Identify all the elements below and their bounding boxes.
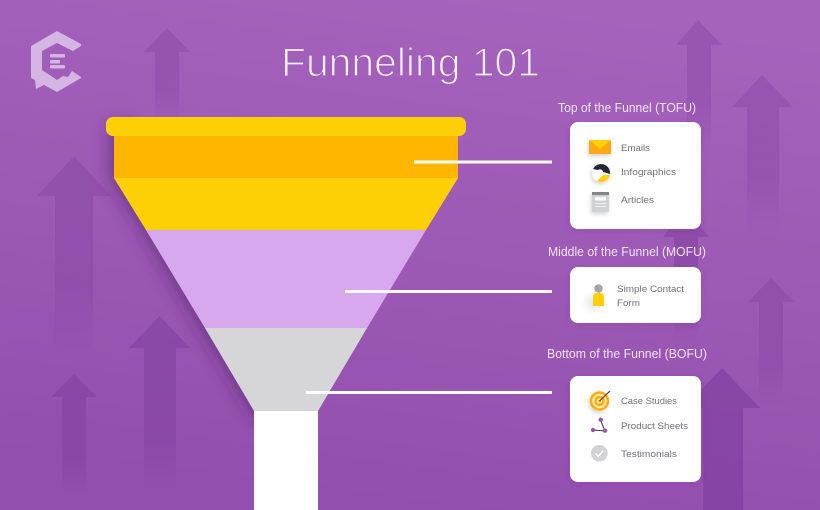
icon: check badge (591, 445, 608, 462)
panel: MOFU (570, 267, 701, 323)
icon: article (592, 192, 609, 212)
panel: BOFU (570, 376, 701, 482)
connector line TOFU (414, 160, 552, 164)
connector line BOFU (306, 391, 552, 394)
icon: target (590, 391, 610, 411)
label: Infographics: Infographics (621, 167, 676, 178)
funnel orange band (114, 135, 458, 178)
label: Case Studies: Case Studies (621, 396, 677, 407)
funnel (106, 117, 466, 510)
icon: pie chart (592, 164, 610, 182)
label: Testimonials: Testimonials (621, 449, 677, 460)
funnel bottom section (205, 328, 367, 411)
funnel stem (254, 411, 318, 510)
logo (31, 31, 81, 92)
heading MOFU: Middle of the Funnel (MOFU) (548, 245, 706, 259)
label: Simple Contact Form: Simple Contact (617, 284, 684, 295)
icon: network nodes (591, 418, 607, 433)
label: Simple Contact Form: Form (617, 298, 640, 309)
heading TOFU: Top of the Funnel (TOFU) (558, 101, 696, 115)
funnel middle section (146, 230, 426, 328)
title: Funneling 101 (281, 41, 540, 85)
funnel top section (114, 178, 458, 230)
icon: person (586, 284, 604, 310)
connector line MOFU (345, 290, 552, 293)
panel: TOFU (570, 122, 701, 229)
heading BOFU: Bottom of the Funnel (BOFU) (547, 347, 707, 361)
label: Emails: Emails (621, 143, 650, 154)
funnel rim (106, 117, 466, 136)
icon: envelope (589, 140, 611, 154)
label: Simple Contact Form (617, 284, 684, 309)
label: Articles: Articles (621, 195, 654, 206)
label: Product Sheets: Product Sheets (621, 421, 688, 432)
